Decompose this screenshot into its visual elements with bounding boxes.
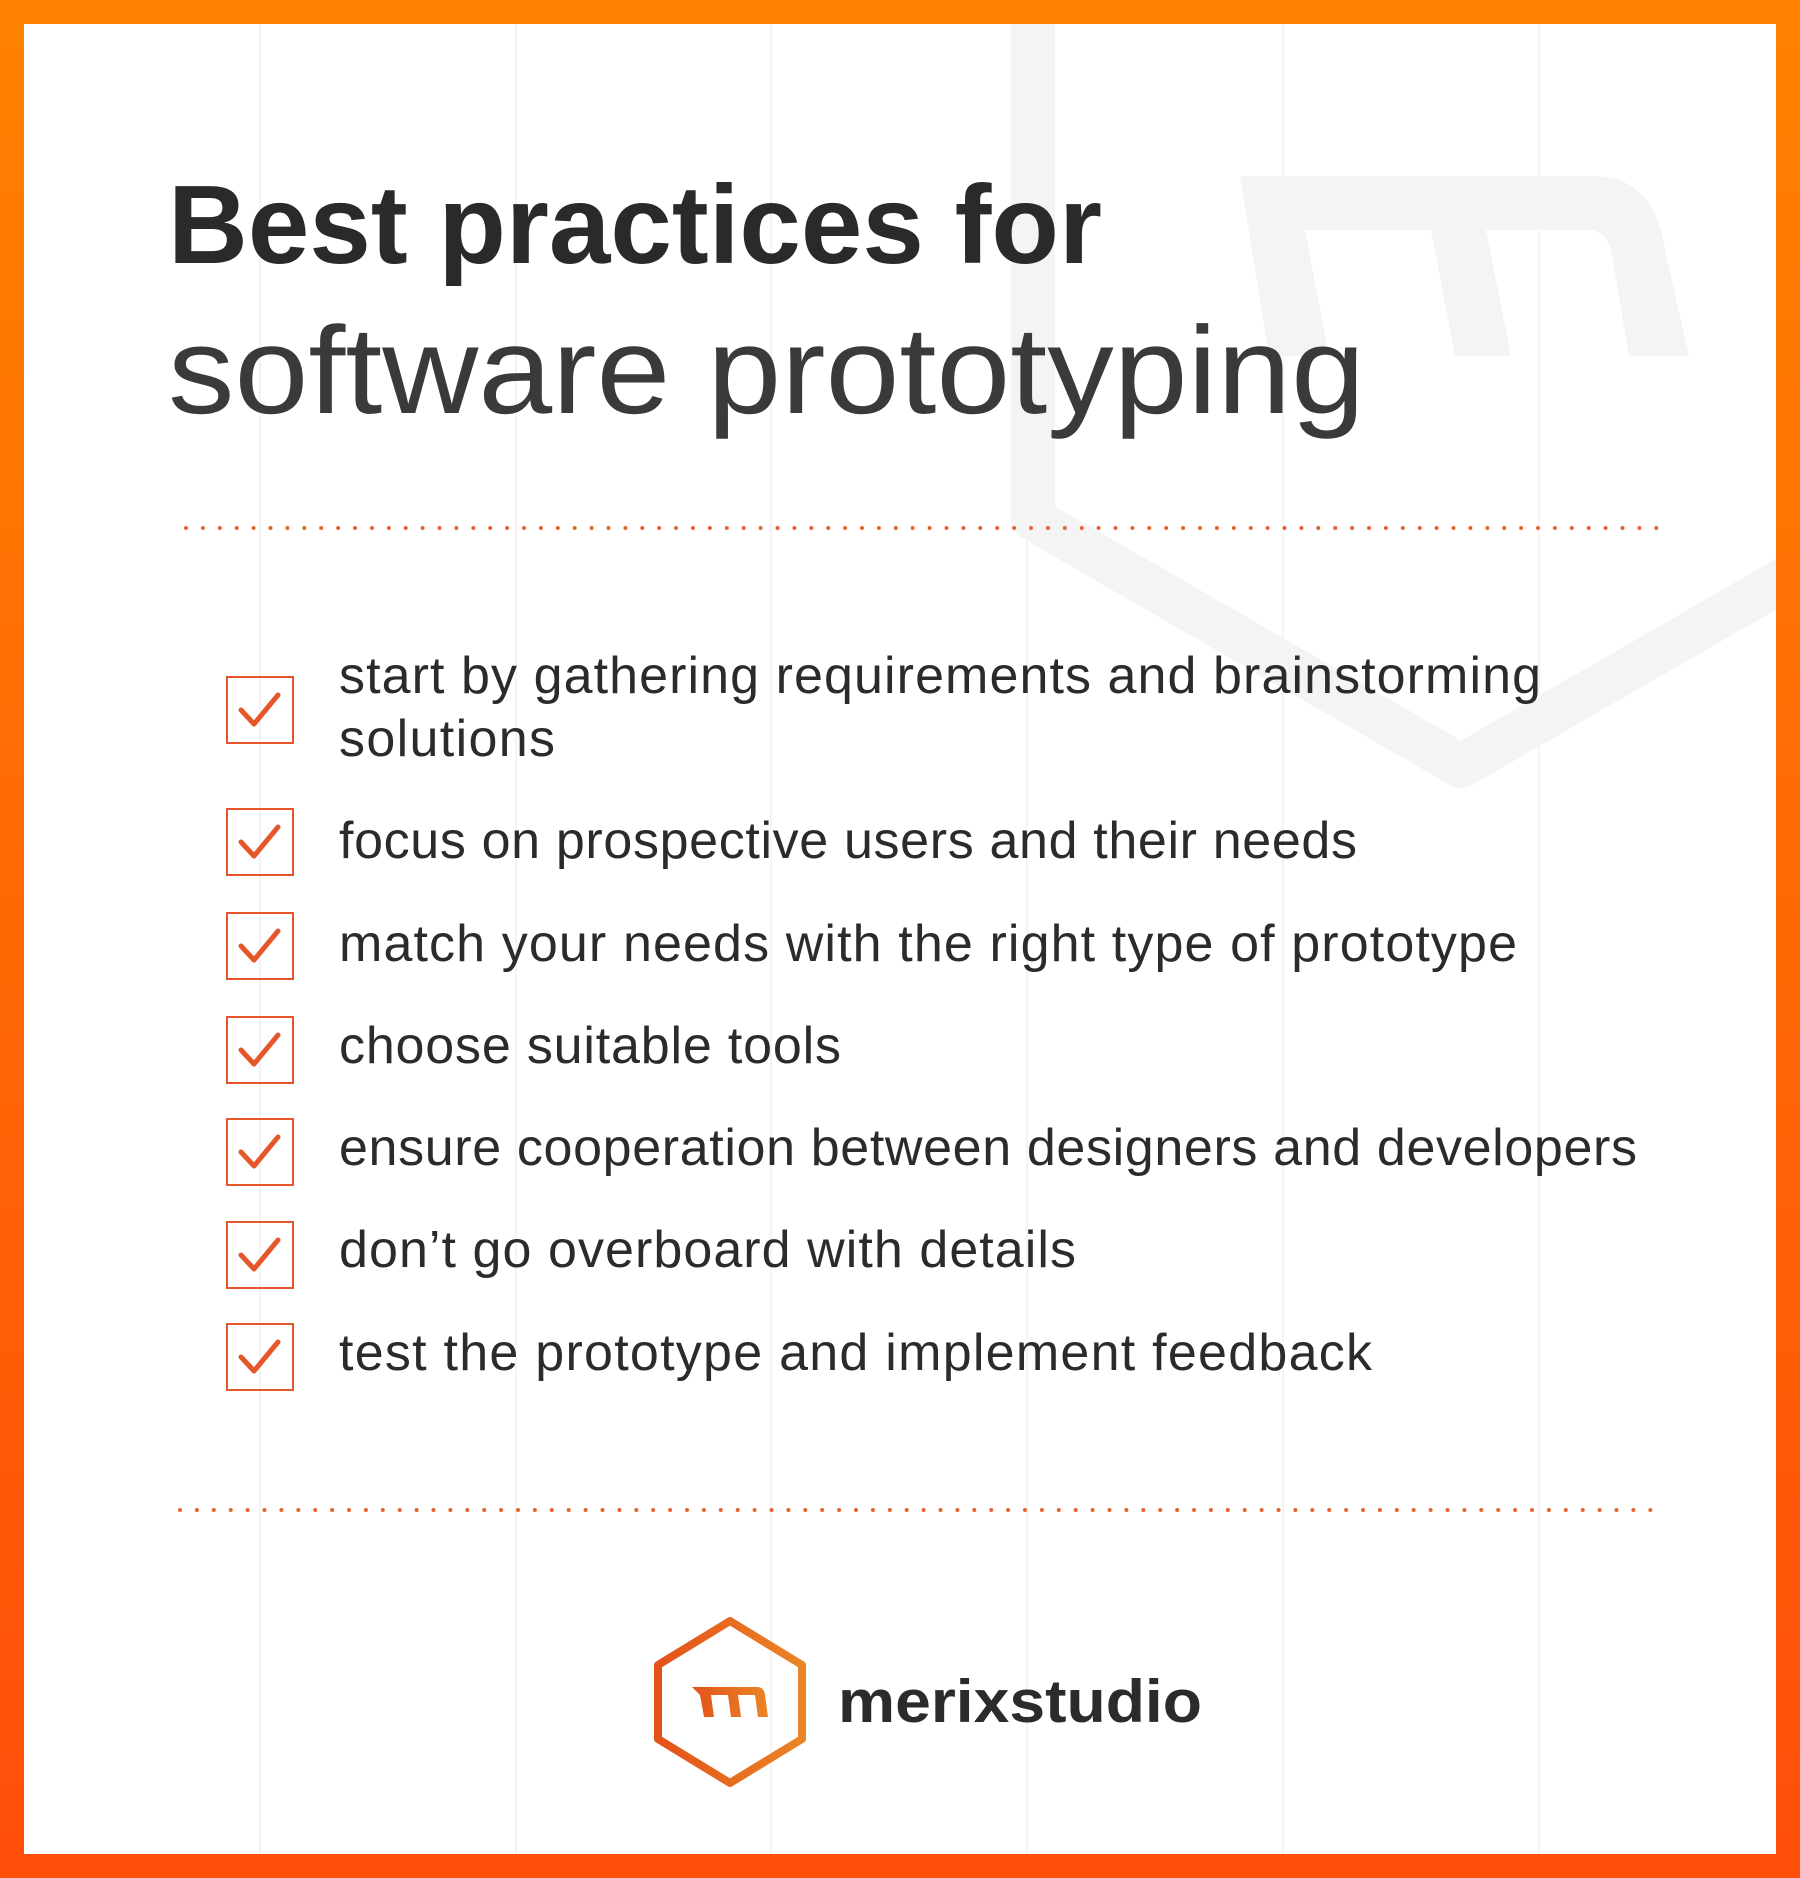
checklist: don’t go overboard with details — [339, 1221, 1076, 1279]
divider top — [186, 526, 1671, 530]
divider bottom — [180, 1508, 1665, 1512]
checklist — [227, 647, 1637, 1390]
checklist: focus on prospective users and their needs — [339, 812, 1357, 870]
title: software prototyping — [168, 302, 1365, 440]
logo: merixstudio — [838, 1668, 1202, 1735]
title: Best practices for — [168, 163, 1102, 287]
logo — [658, 1621, 1202, 1783]
checklist: match your needs with the right type of prototype — [339, 915, 1517, 973]
checklist: ensure cooperation between designers and developers — [339, 1119, 1637, 1177]
watermark logo — [1033, 0, 1800, 766]
checklist: test the prototype and implement feedback — [339, 1324, 1373, 1382]
title — [168, 163, 1365, 440]
checklist: choose suitable tools — [339, 1017, 841, 1075]
checklist: solutions — [339, 710, 555, 768]
checklist: start by gathering requirements and brainstorming — [339, 647, 1541, 705]
